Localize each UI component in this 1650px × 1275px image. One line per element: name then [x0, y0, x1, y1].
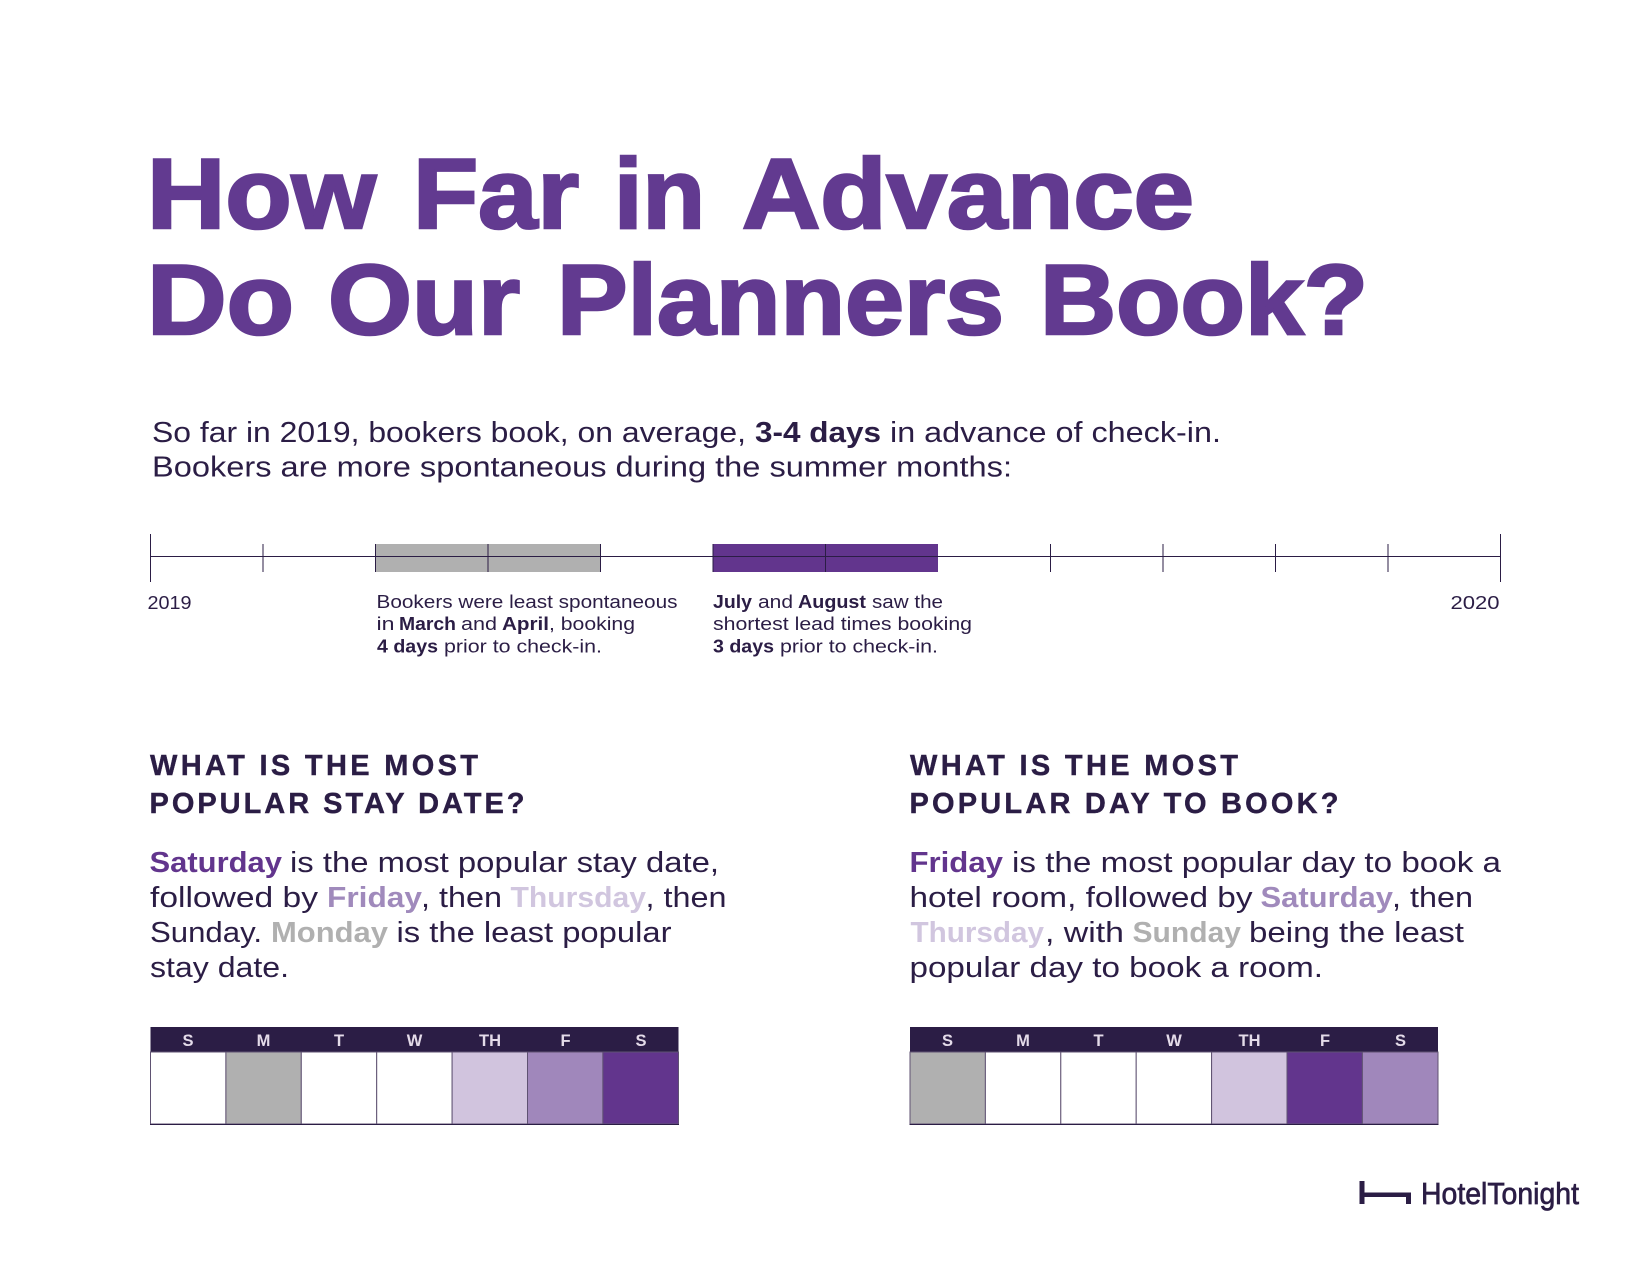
annotation: March and April: March — [399, 613, 456, 634]
text block: day to book: is the most popular day to book a — [1012, 847, 1502, 879]
annotation: July and August: July — [713, 591, 753, 612]
annotation: March and April: April — [502, 613, 549, 634]
annotation: March and April: in — [376, 613, 394, 634]
heading: day to book — [910, 750, 1338, 820]
calendar: stay date: M — [257, 1032, 270, 1050]
heading: day to book: POPULAR DAY TO BOOK? — [910, 788, 1338, 820]
annotation: July and August: 3 days — [713, 636, 774, 656]
calendar: stay date: W — [407, 1032, 423, 1050]
intro text: in advance of check-in. — [890, 417, 1221, 449]
wordmark: HotelTonight — [1421, 1176, 1579, 1211]
text block: stay date: , then — [421, 882, 502, 914]
text block: day to book: being the least — [1249, 917, 1464, 949]
calendar: day to book — [910, 1027, 1438, 1124]
heading: day to book: WHAT IS THE MOST — [910, 750, 1238, 782]
calendar: day to book: S — [942, 1032, 953, 1050]
annotation: March and April: and — [461, 613, 497, 634]
annotation: July and August: and — [758, 591, 793, 612]
calendar: day to book: S — [1395, 1032, 1406, 1050]
text block: day to book: Thursday — [910, 917, 1044, 949]
text block: day to book — [910, 847, 1502, 984]
icon: bed — [1360, 1181, 1411, 1204]
text block: stay date: Saturday — [150, 847, 282, 879]
timeline axis — [150, 534, 1500, 582]
title — [147, 138, 1368, 355]
calendar: stay date: T — [334, 1032, 344, 1050]
highlight: July and August — [712, 544, 938, 572]
calendar: day to book: T — [1093, 1032, 1104, 1050]
text block: day to book: Saturday — [1260, 882, 1393, 914]
label: 2019: 2019 — [148, 592, 192, 613]
annotation: July and August — [713, 591, 972, 656]
text block: stay date: Sunday. — [150, 917, 262, 949]
title: Far — [413, 138, 579, 249]
annotation: July and August: shortest lead times booking — [713, 613, 972, 634]
annotation: July and August: prior to check-in. — [780, 636, 938, 656]
annotation: March and April: 4 days — [377, 636, 438, 656]
text block: stay date: followed by — [150, 882, 319, 914]
logo: HotelTonight — [1360, 1176, 1579, 1211]
intro text — [152, 417, 1221, 484]
annotation: July and August: saw the — [872, 591, 943, 612]
text block: day to book: , with — [1045, 917, 1124, 949]
text block: stay date: Monday — [271, 917, 388, 949]
annotation: March and April — [376, 591, 678, 656]
text block: day to book: , then — [1392, 882, 1473, 914]
highlight: March and April — [376, 544, 600, 572]
heading: stay date: POPULAR STAY DATE? — [150, 788, 524, 820]
text block: day to book: Friday — [910, 847, 1003, 879]
calendar: stay date: S — [635, 1032, 647, 1050]
calendar: stay date: F — [560, 1032, 571, 1050]
title: Planners — [557, 244, 1004, 355]
intro text: 3-4 days — [755, 417, 881, 449]
annotation: July and August: August — [798, 591, 866, 612]
text block: day to book: popular day to book a room. — [910, 952, 1323, 984]
title: in — [614, 138, 705, 249]
panel: popular day to book — [910, 750, 1502, 1124]
heading: stay date — [150, 750, 524, 820]
annotation: March and April: Bookers were least spontaneous — [376, 591, 678, 612]
title: How — [147, 138, 377, 249]
calendar: stay date: TH — [479, 1032, 501, 1050]
calendar: day to book: M — [1016, 1032, 1030, 1050]
text block: stay date: , then — [646, 882, 726, 914]
label: 2020: 2020 — [1450, 592, 1500, 613]
annotation: March and April: prior to check-in. — [444, 636, 602, 656]
text block: day to book: hotel room, followed by — [910, 882, 1253, 914]
panel: popular stay date — [150, 750, 726, 1124]
intro text: Bookers are more spontaneous during the summer months: — [152, 452, 1012, 484]
annotation: March and April: , booking — [549, 613, 635, 634]
text block: day to book: Sunday — [1132, 917, 1241, 949]
text block: stay date: Thursday — [510, 882, 646, 914]
calendar: stay date — [150, 1027, 679, 1124]
text block: stay date: is the least popular — [396, 917, 672, 949]
calendar: day to book: W — [1166, 1032, 1182, 1050]
title: Do — [147, 244, 294, 355]
calendar: day to book: TH — [1238, 1032, 1260, 1050]
title: Our — [328, 244, 520, 355]
title: Book? — [1040, 244, 1368, 355]
text block: stay date: Friday — [327, 882, 422, 914]
heading: stay date: WHAT IS THE MOST — [150, 750, 478, 782]
title: Advance — [742, 138, 1194, 249]
calendar: stay date: S — [182, 1032, 194, 1050]
timeline chart — [148, 534, 1500, 656]
text block: stay date — [150, 847, 726, 984]
calendar: day to book: F — [1320, 1032, 1330, 1050]
intro text: So far in 2019, bookers book, on average, — [152, 417, 746, 449]
text block: stay date: stay date. — [150, 952, 289, 984]
text block: stay date: is the most popular stay date, — [290, 847, 719, 879]
